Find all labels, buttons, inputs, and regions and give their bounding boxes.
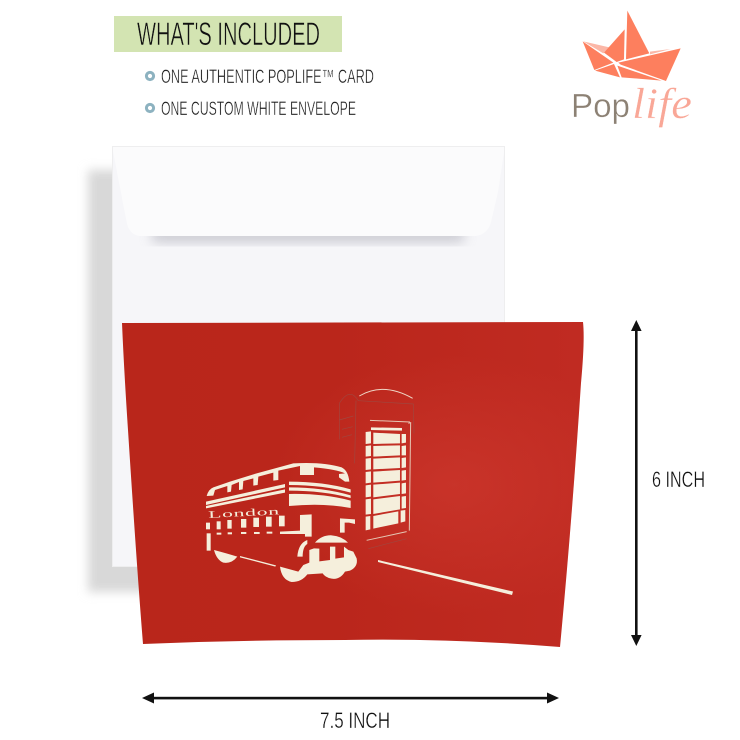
icon: paper boat bbox=[583, 11, 681, 81]
card front bbox=[122, 322, 584, 647]
arrow: card height bbox=[631, 320, 642, 646]
heading: what's included bbox=[114, 16, 342, 52]
list of included items: ONE AUTHENTIC POPLIFE™ CARD bbox=[161, 67, 374, 88]
heading: what's included: WHAT'S INCLUDED bbox=[137, 16, 320, 52]
logo: poplife: Pop bbox=[571, 87, 630, 124]
phone booth cutout bbox=[339, 389, 414, 549]
label: 6 inch: 6 INCH bbox=[652, 467, 705, 492]
logo: poplife: life bbox=[632, 81, 692, 128]
bus lettering: London bbox=[208, 506, 280, 521]
envelope bbox=[88, 146, 505, 592]
list of included items: ONE CUSTOM WHITE ENVELOPE bbox=[161, 99, 356, 120]
arrow: card width bbox=[142, 692, 559, 704]
label: 7.5 inch: 7.5 INCH bbox=[320, 708, 390, 733]
bus cutout bbox=[206, 463, 357, 582]
list of included items bbox=[146, 67, 374, 120]
logo: poplife bbox=[571, 11, 692, 128]
pop-up card bbox=[122, 322, 584, 647]
envelope flap bbox=[112, 146, 505, 236]
road line cutout bbox=[378, 560, 513, 595]
